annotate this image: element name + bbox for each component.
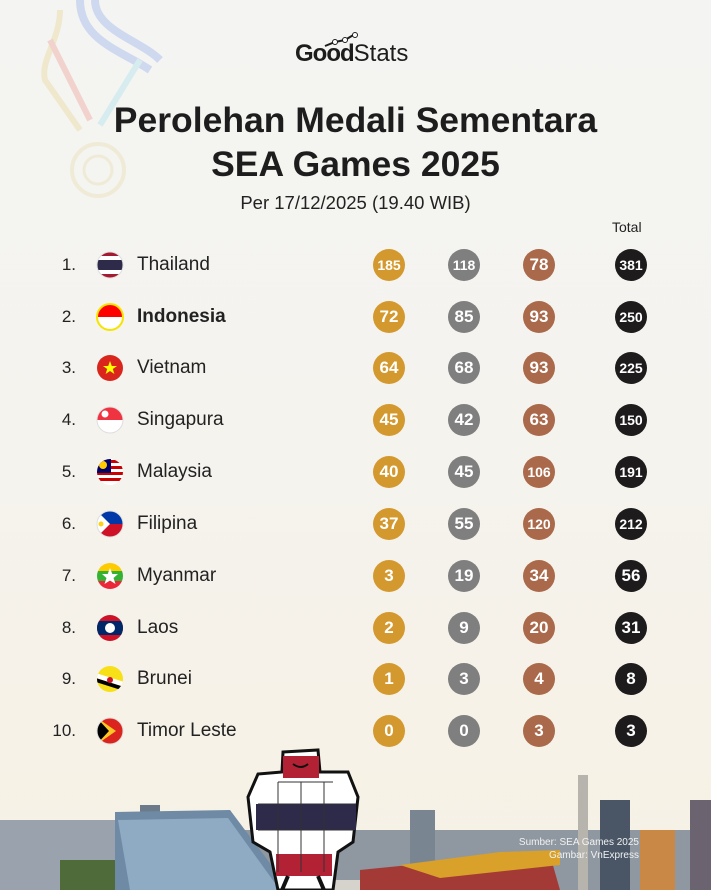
row: Timor Leste: 0 [459, 721, 469, 740]
row: Laos: 9 [459, 618, 469, 637]
row: Indonesia: Indonesia [137, 306, 226, 327]
row: Filipina: 55 [455, 514, 473, 533]
mascot [246, 748, 360, 890]
row: Thailand: 118 [453, 257, 475, 273]
row: Thailand [62, 249, 647, 281]
row: Indonesia: 250 [619, 309, 643, 325]
row: Myanmar: 56 [622, 566, 640, 585]
table rows [52, 249, 647, 747]
row: Filipina: 120 [527, 516, 551, 532]
row: Singapura: 63 [530, 410, 548, 429]
title: SEA Games 2025 [211, 144, 500, 184]
row: Malaysia: 191 [619, 464, 643, 480]
row: Myanmar: Myanmar [137, 565, 216, 586]
row: Vietnam: 225 [619, 360, 643, 376]
source text [519, 837, 639, 861]
logo: GoodStats: GoodStats [295, 40, 408, 67]
row: Laos: 2 [384, 618, 394, 637]
row: Singapura: 45 [380, 410, 398, 429]
row: Brunei [62, 663, 647, 695]
row: Thailand: 381 [619, 257, 643, 273]
row: Malaysia: 40 [380, 462, 398, 481]
row: Vietnam: 68 [455, 358, 473, 377]
row: Thailand: 78 [530, 255, 548, 274]
row: Laos: 20 [530, 618, 548, 637]
row: Timor Leste: 0 [384, 721, 394, 740]
row: Vietnam [62, 352, 647, 384]
row: Timor Leste: 10. [52, 721, 76, 740]
row: Timor Leste [52, 715, 647, 747]
row: Brunei: 8 [626, 669, 636, 688]
row: Laos: 31 [622, 618, 640, 637]
background decoration: SEA games logo [41, 0, 163, 198]
row: Myanmar: 34 [530, 566, 548, 585]
row: Singapura: 150 [619, 412, 643, 428]
row: Vietnam: 64 [380, 358, 398, 377]
source text: Gambar: VnExpress [549, 850, 639, 861]
source text: Sumber: SEA Games 2025 [519, 837, 639, 848]
row: Thailand: 1. [62, 255, 76, 274]
row: Myanmar: 3 [384, 566, 394, 585]
row: Brunei: 9. [62, 669, 76, 688]
stadium background photo [0, 775, 711, 890]
row: Indonesia: 85 [455, 307, 473, 326]
row: Vietnam: 93 [530, 358, 548, 377]
row: Indonesia: 72 [380, 307, 398, 326]
row: Indonesia: 2. [62, 307, 76, 326]
title [114, 100, 598, 184]
row: Timor Leste: 3 [626, 721, 636, 740]
row: Filipina: 6. [62, 514, 76, 533]
row: Indonesia [62, 301, 647, 333]
row: Brunei: 3 [459, 669, 469, 688]
row: Singapura: Singapura [137, 409, 224, 430]
row: Laos [62, 612, 647, 644]
row: Thailand: 185 [377, 257, 401, 273]
row: Filipina: Filipina [137, 513, 197, 534]
row: Vietnam: 3. [62, 358, 76, 377]
row: Laos: 8. [62, 618, 76, 637]
row: Myanmar: 7. [62, 566, 76, 585]
row: Singapura [62, 404, 647, 436]
row: Myanmar [62, 560, 647, 592]
row: Laos: Laos [137, 617, 178, 638]
row: Malaysia: 45 [455, 462, 473, 481]
row: Malaysia: 5. [62, 462, 76, 481]
row: Timor Leste: Timor Leste [137, 720, 237, 741]
row: Myanmar: 19 [455, 566, 473, 585]
row: Filipina: 212 [619, 516, 643, 532]
row: Singapura: 42 [455, 410, 473, 429]
row: Singapura: 4. [62, 410, 76, 429]
title: Perolehan Medali Sementara [114, 100, 597, 140]
row: Vietnam: Vietnam [137, 357, 206, 378]
row: Indonesia: 93 [530, 307, 548, 326]
row: Malaysia: Malaysia [137, 461, 212, 482]
header: Total: Total [612, 219, 642, 235]
row: Thailand: Thailand [137, 254, 210, 275]
row: Malaysia [62, 456, 647, 488]
row: Filipina: 37 [380, 514, 398, 533]
row: Brunei: 1 [384, 669, 394, 688]
row: Brunei: Brunei [137, 668, 192, 689]
row: Brunei: 4 [534, 669, 544, 688]
row: Filipina [62, 508, 647, 540]
row: Timor Leste: 3 [534, 721, 544, 740]
subtitle: Per 17/12/2025 (19.40 WIB) [240, 192, 471, 213]
row: Malaysia: 106 [527, 464, 551, 480]
